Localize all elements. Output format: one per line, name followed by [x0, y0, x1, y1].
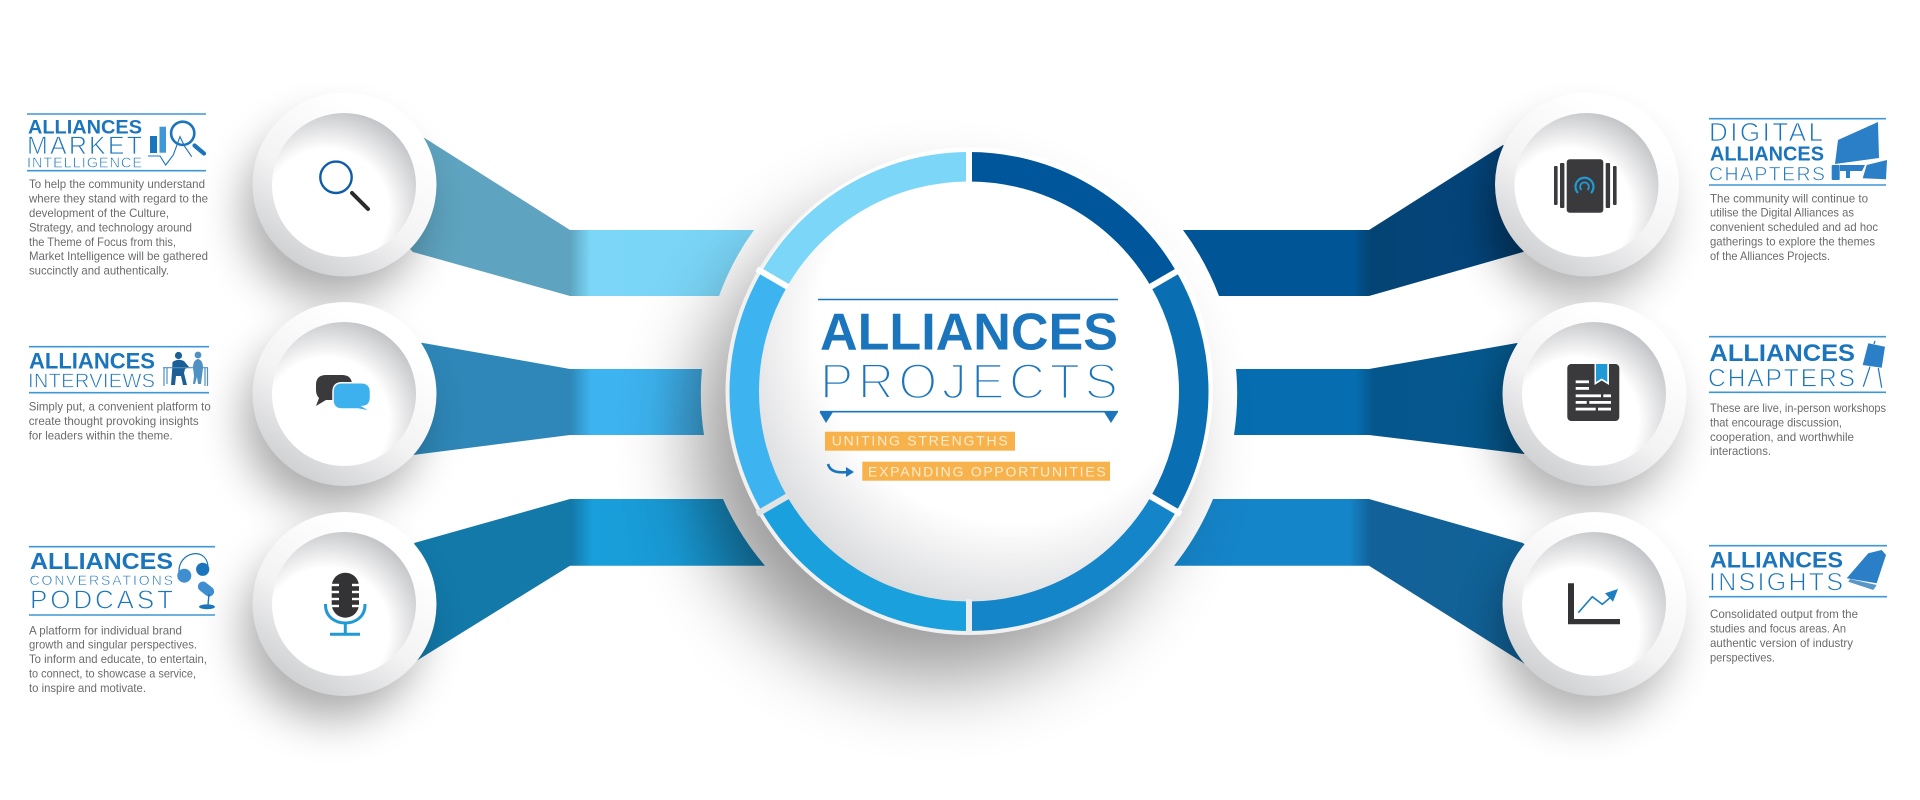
- central hub: [697, 147, 1213, 678]
- panel: alliances chapters: [1708, 337, 1886, 458]
- connector band: digital chapters: [1183, 145, 1587, 296]
- panel: alliances chapters: CHAPTERS: [1708, 366, 1855, 393]
- body text: Simply put, a convenient platform to: [29, 400, 211, 414]
- connector band: market intelligence: [344, 137, 754, 296]
- node: alliances insights: [1497, 512, 1686, 719]
- body text: to connect, to showcase a service,: [29, 666, 196, 680]
- icon: microphone: [326, 573, 365, 634]
- panel: alliances chapters: ALLIANCES: [1710, 341, 1855, 367]
- icon: flipchart: [1863, 341, 1885, 388]
- hub title: [818, 300, 1118, 423]
- body text: growth and singular perspectives.: [29, 638, 197, 652]
- body text: The community will continue to: [1710, 191, 1868, 205]
- node: interviews: [244, 302, 436, 509]
- icon: market analysis: [148, 122, 204, 165]
- body text: A platform for individual brand: [29, 623, 182, 637]
- body text: convenient scheduled and ad hoc: [1710, 220, 1878, 234]
- panel: market intelligence: MARKET: [27, 132, 142, 160]
- panel: podcast: [29, 547, 216, 695]
- panel: interviews: ALLIANCES: [29, 348, 155, 373]
- node: digital alliances chapters: [1490, 92, 1679, 300]
- body text: perspectives.: [1710, 650, 1775, 664]
- body text: gatherings to explore the themes: [1710, 234, 1875, 248]
- hub title: ALLIANCES: [820, 302, 1118, 360]
- ring segments: [744, 148, 1194, 635]
- icon: magnifier: [320, 162, 368, 209]
- body text: These are live, in-person workshops: [1710, 401, 1886, 415]
- icon: devices: [1832, 122, 1887, 180]
- icon: line chart: [1568, 583, 1620, 624]
- body text: studies and focus areas. An: [1710, 621, 1846, 635]
- body text: To inform and educate, to entertain,: [29, 652, 207, 666]
- panel: digital alliances chapters: CHAPTERS: [1709, 164, 1825, 186]
- icon: device: [1554, 159, 1617, 213]
- icon: turn arrow: [828, 464, 854, 477]
- body text: [1710, 191, 1878, 263]
- connector band: interviews: [344, 343, 704, 455]
- panel: interviews: [28, 347, 211, 442]
- body text: to inspire and motivate.: [29, 681, 146, 695]
- node: market intelligence: [244, 92, 436, 300]
- body text: interactions.: [1710, 444, 1771, 458]
- panel: digital alliances chapters: ALLIANCES: [1710, 143, 1824, 166]
- panel: alliances insights: [1709, 546, 1887, 664]
- body text: To help the community understand: [29, 177, 205, 191]
- body text: that encourage discussion,: [1710, 415, 1842, 429]
- body text: of the Alliances Projects.: [1710, 249, 1830, 263]
- icon: people at a desk: [163, 352, 208, 386]
- body text: [1710, 607, 1858, 664]
- panel: podcast: ALLIANCES: [30, 548, 173, 574]
- body text: the Theme of Focus from this,: [29, 235, 176, 249]
- panel: podcast: PODCAST: [30, 585, 173, 615]
- panel: market intelligence: ALLIANCES: [28, 116, 142, 138]
- hub title: PROJECTS: [820, 353, 1118, 409]
- node: podcast: [244, 512, 436, 719]
- body text: [1710, 401, 1886, 458]
- connector band: insights: [1174, 499, 1594, 664]
- body text: succinctly and authentically.: [29, 264, 169, 278]
- body text: [28, 177, 208, 278]
- body text: cooperation, and worthwhile: [1710, 430, 1854, 444]
- node: alliances chapters: [1497, 302, 1686, 509]
- body text: utilise the Digital Alliances as: [1710, 206, 1854, 220]
- panel: digital alliances chapters: [1709, 117, 1887, 263]
- connector band: podcast: [344, 499, 765, 663]
- body text: authentic version of industry: [1710, 636, 1853, 650]
- panel: alliances insights: INSIGHTS: [1709, 569, 1843, 597]
- body text: Consolidated output from the: [1710, 607, 1858, 621]
- panel: digital alliances chapters: DIGITAL: [1709, 117, 1823, 147]
- body text: [29, 623, 207, 695]
- body text: create thought provoking insights: [29, 414, 199, 428]
- body text: for leaders within the theme.: [29, 428, 173, 442]
- body text: Market Intelligence will be gathered: [29, 249, 208, 263]
- icon: report folder: [1847, 550, 1886, 590]
- panel: interviews: INTERVIEWS: [28, 371, 155, 393]
- body text: where they stand with regard to the: [28, 192, 208, 206]
- body text: development of the Culture,: [29, 206, 169, 220]
- panel: market intelligence: [27, 114, 208, 278]
- connector band: chapters: [1234, 343, 1594, 454]
- panel: podcast: CONVERSATIONS: [30, 572, 173, 588]
- icon: chat bubbles: [316, 375, 372, 412]
- tagline: expanding opportunities: EXPANDING OPPORTUNITIES: [868, 464, 1106, 480]
- body text: [29, 400, 211, 442]
- tagline: uniting strengths: UNITING STRENGTHS: [832, 433, 1008, 449]
- icon: book: [1567, 364, 1619, 421]
- panel: alliances insights: ALLIANCES: [1710, 547, 1843, 572]
- panel: market intelligence: INTELLIGENCE: [27, 155, 142, 171]
- body text: Strategy, and technology around: [29, 220, 192, 234]
- icon: headphones and microphone: [177, 554, 216, 609]
